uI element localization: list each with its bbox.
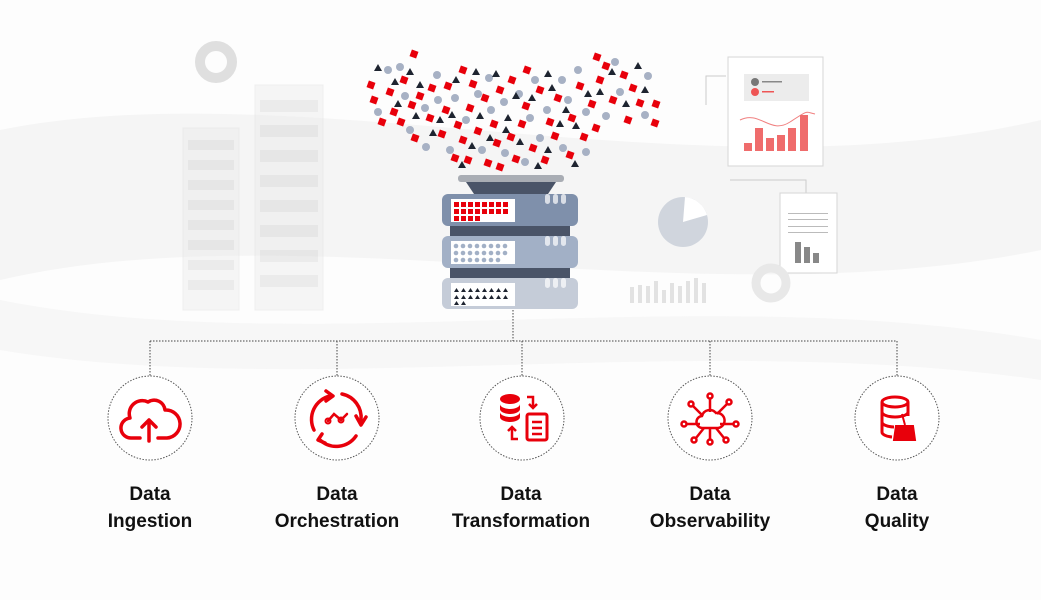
label: Data Ingestion [108,484,192,532]
icon: orchestration cycle [312,391,366,446]
label: Data Transformation: Transformation [452,511,590,532]
funnel [458,175,564,182]
label: Data Transformation [452,484,590,532]
icon: observability [682,394,738,444]
label: Data Quality: Data [876,484,918,505]
label: Data Quality [865,484,930,532]
icon: data quality [882,397,915,440]
decorative left server racks [183,46,323,310]
icon: transformation [500,394,547,440]
label: Data Orchestration: Data [316,484,358,505]
label: Data Orchestration: Orchestration [275,511,399,532]
label: Data Observability: Data [689,484,731,505]
label: Data Ingestion: Ingestion [108,511,192,532]
label: Data Ingestion: Data [129,484,171,505]
label: Data Quality: Quality [865,511,929,532]
label: Data Orchestration [275,484,399,532]
icon: cloud upload [121,400,180,441]
label: Data Transformation: Data [500,484,542,505]
label: Data Observability [650,484,770,532]
label: Data Observability: Observability [650,511,770,532]
